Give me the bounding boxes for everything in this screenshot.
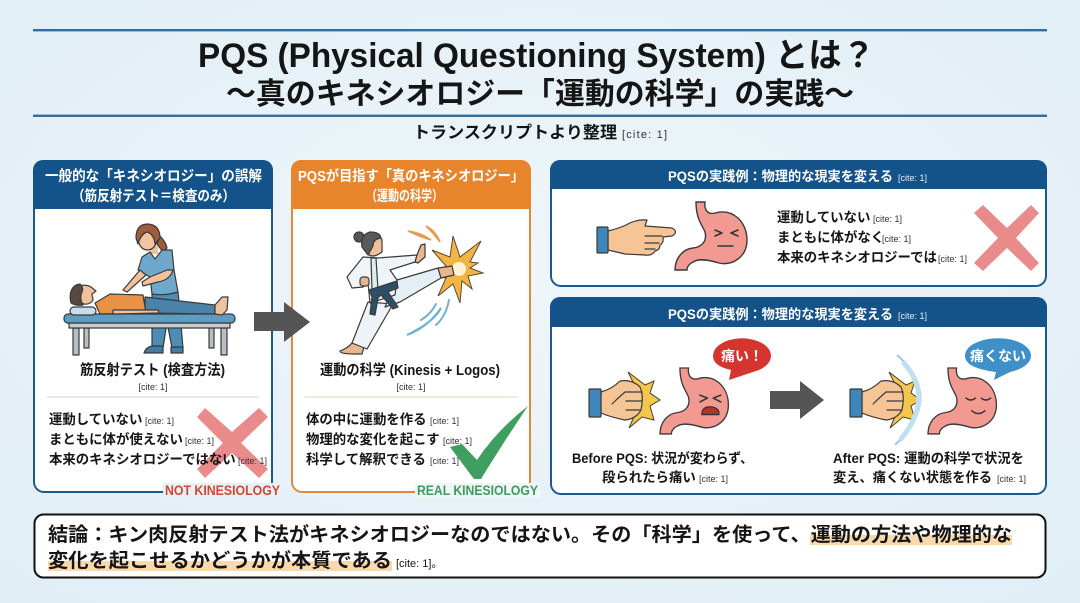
panel: practical example, before and after bbox=[550, 297, 1047, 494]
panel header: true kinesiology: （運動の科学） bbox=[366, 187, 443, 205]
list: true kinesiology points: 科学して解釈できる bbox=[306, 451, 426, 467]
panel header: misconception bbox=[33, 160, 273, 209]
icon: pointing hand bbox=[597, 220, 676, 255]
list: true kinesiology points bbox=[306, 411, 472, 467]
list: misconception points: [cite: 1] bbox=[238, 456, 267, 466]
speech bubble: hurts: 痛い！ bbox=[721, 348, 763, 364]
list: no movement points bbox=[777, 209, 967, 265]
list: no movement points: 運動していない bbox=[777, 209, 870, 225]
panel header: practical example 2 bbox=[550, 297, 1047, 327]
list: no movement points: まともに体がなく bbox=[777, 229, 884, 245]
panel header: practical example 2: PQSの実践例：物理的な現実を変える bbox=[668, 306, 893, 322]
caption: science of movement: [cite: 1] bbox=[396, 382, 426, 392]
panel: practical example, no movement bbox=[550, 160, 1047, 286]
label: real kinesiology: REAL KINESIOLOGY bbox=[417, 483, 538, 498]
list: true kinesiology points: [cite: 1] bbox=[430, 456, 459, 466]
icon: red cross bbox=[197, 408, 268, 478]
caption: muscle reflex test bbox=[80, 361, 225, 392]
caption: science of movement: 運動の科学 (Kinesis + Logos) bbox=[320, 361, 500, 379]
text: after PQS bbox=[833, 450, 1026, 485]
panel: common misconception bbox=[33, 160, 283, 498]
icon: green check bbox=[450, 406, 528, 479]
text: before PQS bbox=[572, 450, 753, 485]
text: before PQS: Before PQS: 状況が変わらず、 bbox=[572, 450, 753, 466]
list: misconception points: 運動していない bbox=[49, 411, 142, 427]
list: no movement points: [cite: 1] bbox=[882, 234, 911, 244]
label: not kinesiology: NOT KINESIOLOGY bbox=[165, 483, 280, 498]
conclusion text bbox=[48, 523, 1012, 572]
panel header: misconception: （筋反射テスト＝検査のみ） bbox=[72, 187, 235, 205]
text: before PQS: [cite: 1] bbox=[699, 474, 728, 484]
text: before PQS: 段られたら痛い bbox=[602, 470, 696, 485]
subtitle: source note: トランスクリプトより整理 bbox=[413, 123, 618, 142]
icon: fist with impact, before bbox=[589, 372, 660, 428]
text: after PQS: After PQS: 運動の科学で状況を bbox=[833, 450, 1024, 466]
panel header: misconception: 一般的な「キネシオロジー」の誤解 bbox=[45, 167, 262, 185]
list: misconception points bbox=[49, 411, 267, 467]
icon: red cross bbox=[974, 205, 1039, 271]
caption: muscle reflex test: 筋反射テスト (検査方法) bbox=[80, 361, 225, 379]
text: after PQS: [cite: 1] bbox=[997, 474, 1026, 484]
panel header: true kinesiology: PQSが目指す「真のキネシオロジー」 bbox=[298, 167, 524, 185]
icon: stomach in pain bbox=[660, 368, 728, 434]
caption: science of movement bbox=[320, 361, 500, 392]
illustration: karate kick with impact burst bbox=[340, 226, 483, 354]
arrow: before to after bbox=[770, 381, 824, 419]
list: misconception points: [cite: 1] bbox=[145, 416, 174, 426]
icon: stomach, neutral bbox=[675, 202, 747, 270]
title: ～真のキネシオロジー「運動の科学」の実践～ bbox=[226, 78, 854, 111]
icon: fist with shield, after bbox=[850, 355, 921, 445]
list: no movement points: 本来のキネシオロジーでは bbox=[777, 249, 937, 265]
list: misconception points: まともに体が使えない bbox=[49, 431, 183, 447]
panel header: practical example 1: PQSの実践例：物理的な現実を変える bbox=[668, 168, 893, 184]
panel header: practical example 1: [cite: 1] bbox=[898, 173, 927, 183]
conclusion text: 結論：キン肉反射テスト法がキネシオロジーなのではない。その「科学」を使って、運動の方法や物理的な bbox=[48, 523, 1012, 546]
illustration: therapist testing patient on table bbox=[64, 224, 235, 355]
list: misconception points: 本来のキネシオロジーではない bbox=[49, 451, 236, 467]
speech bubble: hurts bbox=[713, 338, 771, 380]
panel header: practical example 1 bbox=[550, 160, 1047, 189]
list: true kinesiology points: [cite: 1] bbox=[430, 416, 459, 426]
title bbox=[198, 37, 875, 111]
panel: true kinesiology bbox=[291, 160, 540, 498]
title: PQS (Physical Questioning System) とは？ bbox=[198, 37, 875, 75]
list: no movement points: [cite: 1] bbox=[938, 254, 967, 264]
panel header: practical example 2: [cite: 1] bbox=[898, 311, 927, 321]
subtitle: source note: [cite: 1] bbox=[622, 129, 667, 141]
conclusion text: 変化を起こせるかどうかが本質である bbox=[48, 549, 392, 572]
list: true kinesiology points: 体の中に運動を作る bbox=[306, 411, 427, 427]
text: after PQS: 変え、痛くない状態を作る bbox=[833, 469, 992, 485]
arrow: misconception to true kinesiology bbox=[254, 302, 310, 342]
icon: calm stomach bbox=[928, 368, 996, 434]
conclusion text: [cite: 1]。 bbox=[396, 558, 442, 570]
speech bubble: no pain: 痛くない bbox=[970, 348, 1026, 364]
speech bubble: no pain bbox=[965, 338, 1031, 380]
list: misconception points: [cite: 1] bbox=[185, 436, 214, 446]
conclusion box bbox=[34, 514, 1046, 578]
list: true kinesiology points: 物理的な変化を起こす bbox=[306, 431, 440, 447]
list: true kinesiology points: [cite: 1] bbox=[443, 436, 472, 446]
caption: muscle reflex test: [cite: 1] bbox=[138, 382, 168, 392]
list: no movement points: [cite: 1] bbox=[873, 214, 902, 224]
panel header: true kinesiology bbox=[291, 160, 531, 209]
